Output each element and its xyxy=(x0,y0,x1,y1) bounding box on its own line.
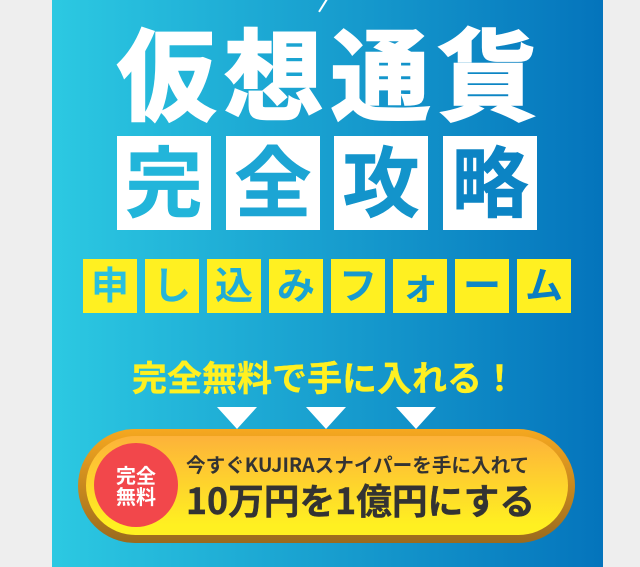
arrows: three down triangles xyxy=(217,407,436,429)
title: 仮想通貨: 貨 xyxy=(438,0,537,141)
heading: 申し込みフォーム yellow tiles: ム xyxy=(525,255,563,310)
heading: 申し込みフォーム yellow tiles: 申 xyxy=(91,255,129,310)
badge: 完全無料: 無料 xyxy=(116,481,156,510)
heading: 申し込みフォーム yellow tiles: フ xyxy=(339,255,377,310)
title: 仮想通貨: 想 xyxy=(224,0,323,141)
badge: 完全無料: 完全 xyxy=(116,460,156,489)
decorative white tick xyxy=(318,0,328,12)
button line 2: 10万円を1億円にする xyxy=(186,474,535,525)
heading: 完全攻略 white tiles: 完 xyxy=(126,123,202,234)
button inner face xyxy=(86,436,568,535)
title: 仮想通貨: 通 xyxy=(331,0,430,141)
heading: 申し込みフォーム yellow tiles xyxy=(83,255,571,313)
button line 1: 今すぐKUJIRAスナイパーを手に入れて xyxy=(186,449,529,478)
heading: 完全攻略 white tiles: 略 xyxy=(452,123,528,234)
subheading: 完全無料で手に入れる！: 完全無料で手に入れる！ xyxy=(132,351,517,402)
button: call to action xyxy=(78,429,575,543)
heading: 申し込みフォーム yellow tiles: し xyxy=(153,255,191,310)
heading: 完全攻略 white tiles: 攻 xyxy=(342,123,420,234)
heading: 申し込みフォーム yellow tiles: 込 xyxy=(215,255,253,310)
title: 仮想通貨 xyxy=(116,0,537,141)
heading: 申し込みフォーム yellow tiles: み xyxy=(277,255,315,310)
heading: 申し込みフォーム yellow tiles: ォ xyxy=(401,255,439,310)
title: 仮想通貨: 仮 xyxy=(117,0,216,141)
heading: 完全攻略 white tiles xyxy=(117,123,537,234)
heading: 完全攻略 white tiles: 全 xyxy=(234,123,312,234)
badge: 完全無料 xyxy=(94,443,178,527)
heading: 申し込みフォーム yellow tiles: ー xyxy=(463,255,501,310)
